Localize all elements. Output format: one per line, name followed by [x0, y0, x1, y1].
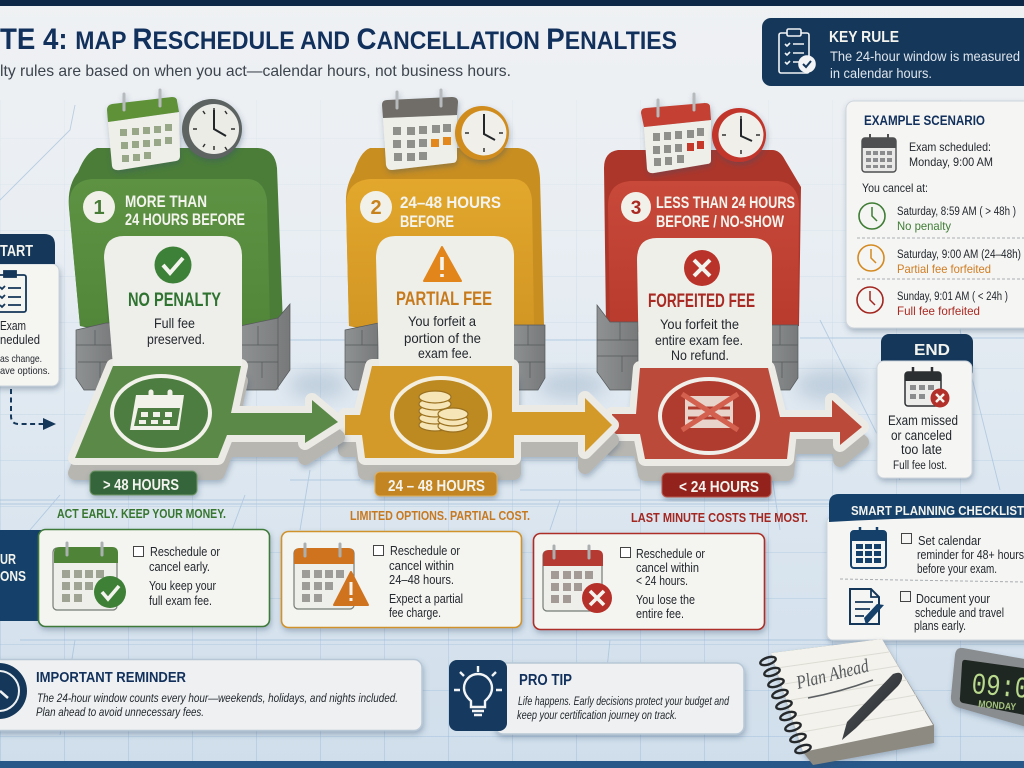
row: sunday 9:01: Full fee forfeited [897, 304, 980, 318]
ring: crossed fee [660, 379, 758, 453]
body text: in calendar hours. [830, 66, 932, 81]
panel: example scenario [846, 101, 1024, 328]
panel: example scenario: Monday, 9:00 AM [909, 155, 993, 169]
step heading: LESS THAN 24 HOURS [656, 193, 795, 212]
panel: pro tip [449, 660, 744, 734]
step heading [125, 192, 245, 229]
arch: green [69, 148, 290, 390]
window panel [637, 238, 772, 368]
outcome detail: portion of the [404, 330, 481, 346]
icon: clipboard check [779, 29, 815, 73]
icon: calendar grey [382, 90, 458, 170]
icon: calendar check [53, 543, 126, 610]
panel: start: as change. [0, 353, 42, 365]
card: limited options [282, 532, 522, 628]
card: act early: Reschedule or [150, 545, 220, 559]
panel: smart planning checklist: Document your [916, 592, 990, 606]
outcome: PARTIAL FEE [396, 289, 492, 310]
digital clock: MONDAY [978, 699, 1017, 713]
step heading: 24 HOURS BEFORE [125, 210, 245, 229]
arch: amber [345, 148, 545, 390]
panel: smart planning checklist [827, 494, 1024, 640]
pill: less than 24 hours: < 24 HOURS [679, 479, 759, 496]
step heading: BEFORE [400, 212, 454, 231]
panel: start: ave options. [0, 365, 50, 377]
panel: end: END [914, 342, 950, 359]
icon: calendar [862, 134, 896, 172]
outcome detail [404, 313, 481, 361]
subtitle: lty rules are based on when you act—calendar hours, not business hours. [0, 63, 511, 80]
panel: pro tip: Life happens. Early decisions protect your budget and [518, 694, 729, 708]
icon: checklist [0, 271, 26, 312]
body text [830, 49, 1020, 81]
your options tab: UR [0, 551, 16, 568]
row: saturday 8:59: No penalty [897, 219, 951, 233]
number badge 3: 3 [631, 198, 641, 219]
tagline green: ACT EARLY. KEEP YOUR MONEY. [57, 506, 226, 521]
icon: document and pencil [850, 589, 884, 625]
panel: smart planning checklist: schedule and travel [915, 606, 1004, 620]
card: last minute: < 24 hours. [636, 574, 688, 588]
row: saturday 8:59 [859, 203, 1016, 233]
outcome detail [655, 316, 743, 363]
card: limited options: cancel within [389, 559, 454, 573]
icon: light bulb [449, 660, 507, 731]
icon: clock amber [455, 106, 509, 160]
panel: end: Exam missed [888, 413, 958, 428]
ring: coins [392, 378, 490, 452]
icon: warning [424, 247, 461, 281]
step 2: amber gate [360, 90, 514, 366]
card: limited options: 24–48 hours. [389, 573, 454, 587]
pen [842, 673, 902, 740]
path: amber platform and arrow [345, 366, 612, 473]
panel: important reminder: IMPORTANT REMINDER [36, 670, 186, 686]
card: limited options: Reschedule or [390, 544, 460, 558]
window panel [104, 236, 242, 366]
pill: more than 48 hours: > 48 HOURS [103, 477, 179, 494]
panel: end: too late [901, 442, 942, 457]
card: last minute: Reschedule or [636, 547, 705, 561]
outcome detail [147, 315, 205, 347]
arrow: start to step 1 [11, 389, 56, 430]
card: act early: full exam fee. [149, 594, 212, 608]
arch: red [597, 150, 801, 390]
stone piers [345, 323, 545, 390]
tagline amber: LIMITED OPTIONS. PARTIAL COST. [350, 508, 530, 523]
step heading [400, 193, 501, 231]
step 1: green gate [83, 90, 245, 366]
icon: calendar cross [905, 367, 950, 408]
panel: end [877, 334, 973, 478]
panel: example scenario: You cancel at: [862, 181, 928, 195]
icon: clock red [712, 108, 766, 162]
panel: important reminder: Plan ahead to avoid unnecessary fees. [36, 705, 204, 719]
pill: more than 48 hours [90, 471, 197, 495]
card: act early [38, 530, 270, 626]
window panel [376, 236, 514, 366]
outcome detail: Full fee [154, 315, 195, 331]
panel: start: neduled [0, 332, 40, 347]
row: sunday 9:01 [857, 287, 1008, 318]
number badge 3 [621, 192, 651, 222]
icon: calendar cross [543, 546, 612, 613]
your options tab [0, 530, 42, 621]
panel: end: Full fee lost. [893, 460, 947, 472]
your options tab: ONS [0, 568, 26, 585]
tagline red: LAST MINUTE COSTS THE MOST. [631, 510, 808, 525]
panel: important reminder: The 24-hour window counts every hour—weekends, holidays, and nights included. [37, 691, 398, 705]
panel: smart planning checklist: Set calendar [918, 534, 981, 548]
icon: clock green [182, 99, 242, 159]
card: limited options: fee charge. [389, 606, 441, 620]
number badge 2: 2 [370, 197, 382, 219]
number badge 2 [360, 191, 392, 223]
outcome detail: exam fee. [418, 345, 472, 361]
icon: calendar [851, 527, 886, 568]
panel: start [0, 234, 59, 386]
outcome detail: You forfeit the [660, 316, 739, 332]
pill: 24 to 48 hours: 24 – 48 HOURS [388, 478, 485, 495]
step heading: MORE THAN [125, 192, 207, 211]
panel: example scenario: Exam scheduled: [909, 140, 991, 154]
card: last minute: cancel within [636, 561, 699, 575]
outcome detail: preserved. [147, 331, 205, 347]
card: limited options: Expect a partial [389, 592, 463, 606]
outcome: FORFEITED FEE [648, 291, 755, 312]
stone piers [597, 305, 798, 390]
panel: end: or canceled [891, 428, 952, 443]
panel: smart planning checklist: before your exam. [917, 562, 997, 576]
path: red platform and arrow [612, 368, 862, 474]
icon: calendar red [641, 94, 711, 173]
panel: key rule [762, 18, 1024, 86]
title: TE 4: MAP RESCHEDULE AND CANCELLATION PENALTIES [0, 23, 677, 56]
row: saturday 9:00: Partial fee forfeited [897, 262, 991, 276]
top bar [0, 0, 1024, 6]
step heading: BEFORE / NO-SHOW [656, 212, 785, 231]
row: saturday 9:00 [858, 245, 1021, 276]
card: last minute: entire fee. [636, 607, 684, 621]
outcome detail: entire exam fee. [655, 332, 743, 348]
outcome detail: No refund. [671, 347, 729, 363]
icon: calendar warning [294, 544, 368, 609]
bottom bar [0, 761, 1024, 768]
outcome detail: You forfeit a [408, 313, 476, 329]
card: last minute: You lose the [636, 593, 695, 607]
icon: calendar green [107, 90, 180, 170]
step 3: red gate [621, 94, 795, 368]
card: act early: You keep your [149, 579, 216, 593]
path: green platform and arrow [75, 366, 338, 473]
icon: clock [0, 663, 27, 719]
panel: smart planning checklist: plans early. [914, 619, 966, 633]
notebook with pen [759, 639, 934, 765]
icon: cross [684, 250, 720, 286]
step heading [656, 193, 795, 231]
ring: calendar [112, 376, 210, 450]
card: last minute [534, 534, 764, 630]
icon: check [154, 246, 192, 284]
pill: less than 24 hours [662, 473, 771, 497]
digital clock [951, 648, 1024, 728]
panel: start: TART [0, 243, 33, 260]
card: act early: cancel early. [149, 560, 210, 574]
pill: 24 to 48 hours [375, 472, 497, 496]
number badge 1 [83, 191, 115, 223]
heading: EXAMPLE SCENARIO [864, 113, 985, 128]
step heading: 24–48 HOURS [400, 193, 501, 212]
outcome: NO PENALTY [128, 290, 221, 311]
heading: KEY RULE [829, 29, 899, 46]
body text: The 24-hour window is measured [830, 49, 1020, 64]
number badge 1: 1 [93, 197, 105, 219]
panel: start: Exam [0, 318, 26, 333]
handwriting: Plan Ahead [793, 655, 871, 694]
panel: important reminder [0, 660, 422, 730]
panel: pro tip: PRO TIP [519, 672, 572, 689]
panel: pro tip: keep your certification journey on track. [517, 708, 677, 722]
stone piers [76, 304, 290, 390]
